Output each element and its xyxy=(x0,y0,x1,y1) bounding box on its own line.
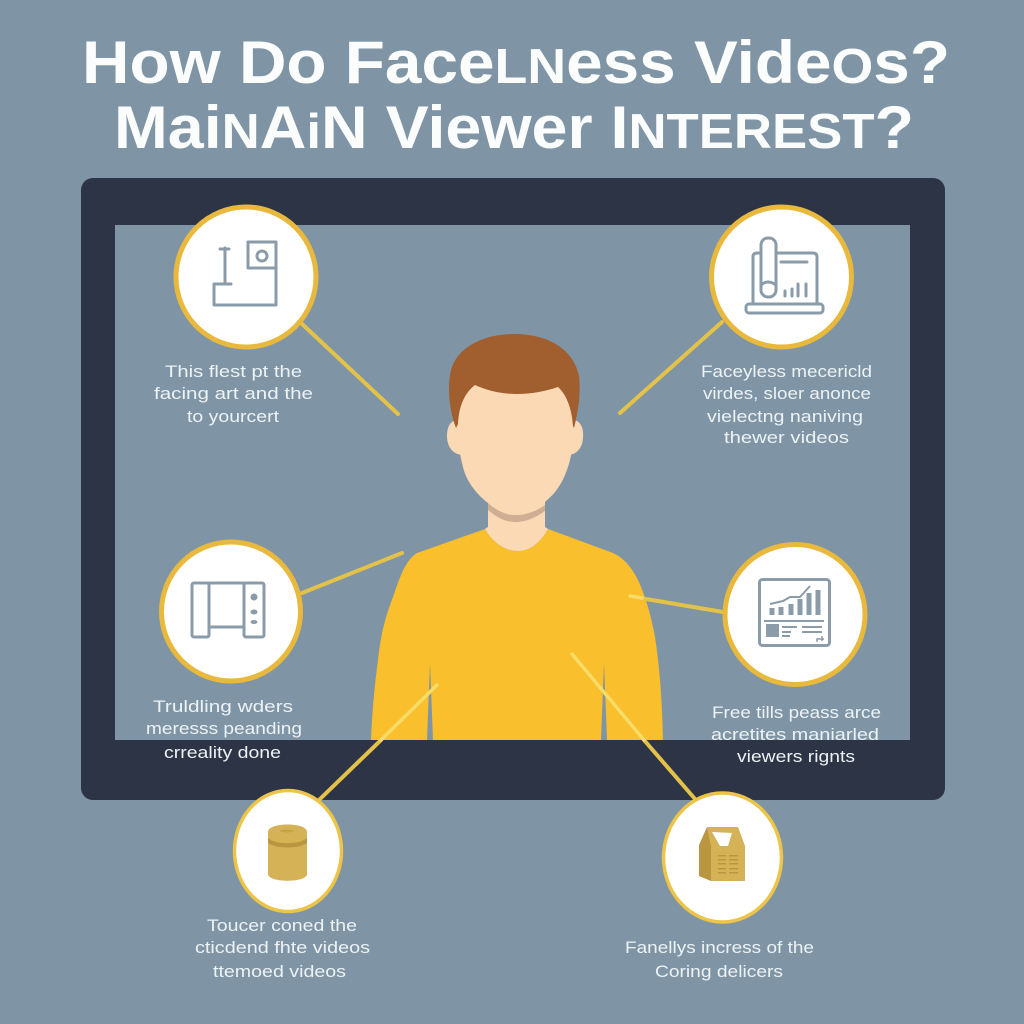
circle xyxy=(176,207,316,347)
text block: cticdend fhte videos xyxy=(195,938,370,957)
text block: crreality done xyxy=(164,743,281,762)
connector: over shirt xyxy=(630,596,642,598)
connector xyxy=(300,322,398,414)
callout: bottom right xyxy=(572,654,814,981)
circle xyxy=(712,207,852,347)
chin shadow xyxy=(488,503,545,522)
circle xyxy=(664,793,782,922)
circle xyxy=(162,542,300,681)
text block xyxy=(195,916,370,981)
text block: Free tills peass arce xyxy=(712,703,881,722)
connector: over shirt xyxy=(572,654,644,740)
connector: lower xyxy=(644,740,695,799)
text block: to yourcert xyxy=(187,407,279,426)
text block: facing art and the xyxy=(154,384,313,403)
ears xyxy=(447,420,583,455)
icon: cardboard carrier box xyxy=(699,827,745,881)
text block: ttemoed videos xyxy=(213,962,346,981)
callout: middle left xyxy=(146,542,402,762)
title xyxy=(82,29,950,161)
connector: outside shirt xyxy=(640,598,723,612)
text block xyxy=(154,362,313,426)
callout: top right xyxy=(620,207,872,447)
connector: lower xyxy=(319,740,381,800)
neck xyxy=(485,495,548,551)
text block xyxy=(146,697,302,762)
text block: Faceyless mecericld xyxy=(701,362,872,381)
connector xyxy=(302,553,402,593)
icon: camera device xyxy=(214,242,276,305)
text block: Toucer coned the xyxy=(207,916,357,935)
faceless person xyxy=(371,334,663,740)
text block xyxy=(625,938,814,981)
text block: acretites maniarled xyxy=(711,725,879,744)
text block: vielectng naniving xyxy=(707,407,863,426)
icon: analytics report xyxy=(760,580,830,646)
connector xyxy=(620,322,722,413)
circle xyxy=(725,544,865,684)
face xyxy=(458,385,573,515)
shirt xyxy=(371,529,663,740)
monitor frame xyxy=(81,178,945,800)
text block: This flest pt the xyxy=(165,362,302,381)
text block: Fanellys incress of the xyxy=(625,938,814,957)
text block xyxy=(711,703,881,766)
text block: meresss peanding xyxy=(146,719,302,738)
title: MaiNAiN Viewer I NTEREST ? xyxy=(114,94,914,161)
text block xyxy=(701,362,872,447)
text block: Coring delicers xyxy=(655,962,783,981)
callout: middle right xyxy=(630,544,881,766)
text block: viewers rignts xyxy=(737,747,855,766)
icon: laptop with chart xyxy=(746,238,823,313)
connector: over shirt xyxy=(381,685,437,740)
hair xyxy=(449,334,580,428)
text block: virdes, sloer anonce xyxy=(703,384,871,403)
sleeve gaps xyxy=(427,663,607,740)
circle xyxy=(234,790,342,912)
callout: top left xyxy=(154,207,398,426)
title: How Do Face LNess Vide Os? xyxy=(82,29,950,96)
icon: gold cylinder xyxy=(268,824,307,881)
callout: bottom left xyxy=(195,685,437,981)
icon: screen device xyxy=(192,583,264,637)
text block: thewer videos xyxy=(724,428,849,447)
text block: Truldling wders xyxy=(153,697,293,716)
